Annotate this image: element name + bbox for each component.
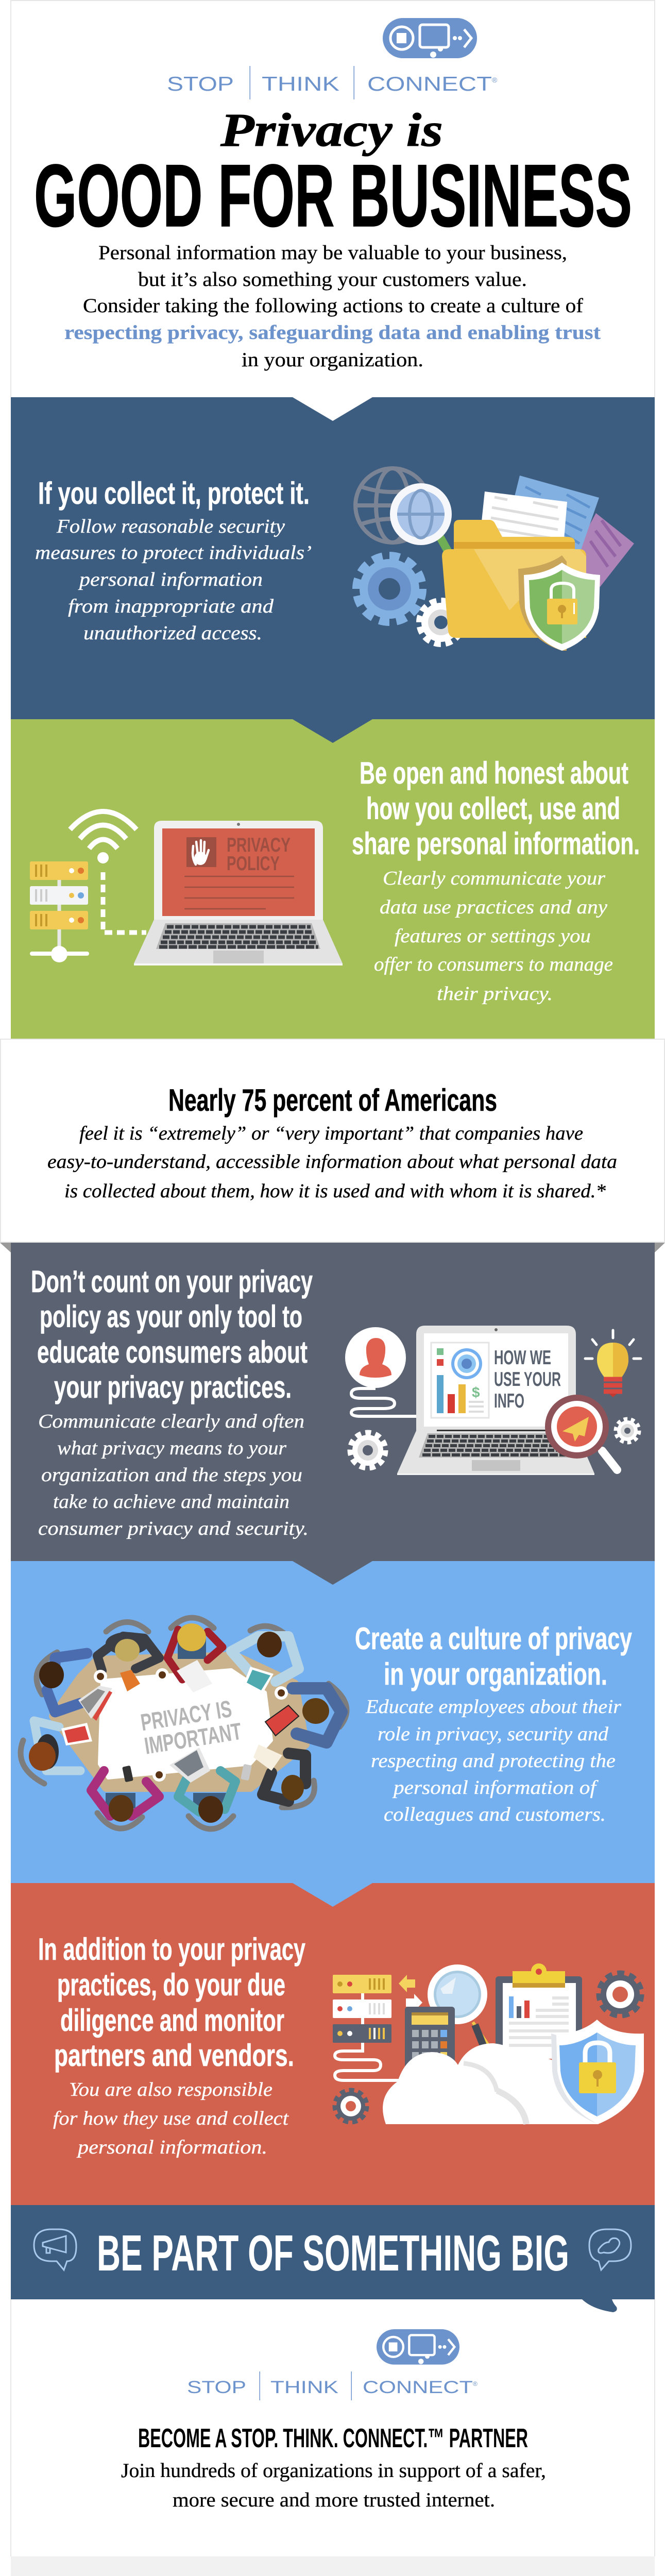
- icon: magnifier with paper plane: [545, 1395, 617, 1470]
- how we use your info label: USE YOUR: [494, 1368, 561, 1391]
- partner text: more secure and more trusted internet.: [173, 2489, 495, 2511]
- panel: create a culture of privacy: [11, 1561, 655, 1883]
- icon: logo pill: [383, 18, 477, 58]
- panel body text: unauthorized access.: [83, 622, 262, 644]
- logo wordmark: ®: [473, 2380, 478, 2387]
- title: [34, 104, 632, 245]
- panel heading: [355, 1621, 632, 1691]
- panel heading: practices, do your due: [57, 1968, 285, 2002]
- logo: partner section: [187, 2329, 478, 2400]
- icon: laptop how we use your info: [345, 1326, 641, 1475]
- logo wordmark: CONNECT: [367, 73, 492, 95]
- icon: gears: [335, 1973, 641, 2122]
- panel body text: personal information: [78, 569, 263, 590]
- icon: arrows: [399, 1975, 422, 2011]
- panel body text: data use practices and any: [380, 896, 607, 918]
- panel body text: from inappropriate and: [68, 596, 274, 617]
- panel body text: [374, 868, 613, 1005]
- table props: [61, 1660, 299, 1783]
- how we use your info label: INFO: [494, 1390, 524, 1412]
- icon: megaphone bubble: [34, 2229, 76, 2270]
- panel: footer: [11, 2556, 655, 2576]
- panel body text: [38, 1411, 309, 1539]
- panel body text: features or settings you: [395, 925, 591, 947]
- icon: stop hand: [193, 840, 209, 865]
- person: navy shirt: [293, 1688, 342, 1742]
- icon: gears: [350, 1419, 639, 1468]
- title line: privacy is: Privacy is: [220, 104, 443, 156]
- intro text: but it’s also something your customers value.: [138, 268, 527, 291]
- panel body text: measures to protect individuals’: [35, 542, 312, 564]
- panel heading: your privacy practices.: [54, 1370, 292, 1404]
- panel heading: [38, 1932, 305, 2073]
- logo wordmark: [187, 2371, 478, 2400]
- partner text: Join hundreds of organizations in support of a safer,: [121, 2460, 546, 2482]
- panel: do not count on your privacy policy: [11, 1243, 655, 2576]
- privacy policy label: POLICY: [227, 853, 280, 875]
- panel: be part of something big banner: [11, 2205, 655, 2312]
- icon: user bubble with cord: [345, 1327, 416, 1416]
- panel body text: their privacy.: [437, 983, 553, 1005]
- partner text: [121, 2460, 546, 2511]
- panel body text: [365, 1696, 621, 1825]
- logo wordmark: STOP: [167, 73, 234, 95]
- logo wordmark: [167, 66, 498, 99]
- icon: magnifier: [428, 1964, 489, 2061]
- panel body text: what privacy means to your: [57, 1437, 286, 1459]
- panel body text: offer to consumers to manage: [374, 954, 613, 975]
- panel body text: role in privacy, security and: [378, 1723, 609, 1745]
- panel body text: [35, 516, 312, 644]
- statistic body text: feel it is “extremely” or “very important” that companies have: [79, 1123, 583, 1144]
- icon: globe, folder and shield: [355, 468, 634, 651]
- illustration: servers, clipboard, cloud, shield: [333, 1963, 644, 2124]
- logo wordmark: CONNECT: [363, 2378, 473, 2397]
- icon: clipboard report: [496, 1963, 582, 2059]
- panel body text: personal information of: [392, 1777, 599, 1799]
- panel body text: colleagues and customers.: [384, 1804, 606, 1825]
- icon: bird bubble: [589, 2229, 631, 2270]
- logo wordmark: THINK: [262, 73, 339, 95]
- statistic body text: is collected about them, how it is used and with whom it is shared.*: [64, 1180, 606, 1202]
- person: left blue shirt: [39, 1653, 87, 1712]
- panel body text: You are also responsible: [69, 2079, 272, 2100]
- logo: stop think connect header: [167, 18, 498, 99]
- icon: wifi and servers: [30, 811, 146, 962]
- logo wordmark: ®: [492, 76, 498, 84]
- privacy policy label: PRIVACY: [227, 834, 291, 856]
- statistic heading: Nearly 75 percent of Americans: [168, 1083, 497, 1117]
- panel heading: In addition to your privacy: [38, 1932, 305, 1967]
- panel: if you collect it: [11, 397, 655, 719]
- illustration: meeting table with people: [21, 1618, 347, 1829]
- icon: cloud: [383, 2043, 598, 2124]
- intro text: Personal information may be valuable to your business,: [98, 242, 567, 264]
- person: dark jacket: [97, 1632, 159, 1671]
- panel body text: respecting and protecting the: [371, 1750, 616, 1772]
- panel: be open and honest: [11, 719, 655, 1039]
- panel body text: consumer privacy and security.: [38, 1518, 309, 1539]
- privacy policy label: [227, 834, 291, 875]
- logo wordmark: THINK: [270, 2378, 338, 2397]
- person: black suit: [263, 1753, 305, 1801]
- table label: IMPORTANT: [143, 1718, 243, 1759]
- how we use your info label: HOW WE: [494, 1347, 551, 1369]
- panel body text: organization and the steps you: [41, 1464, 302, 1486]
- panel body text: Communicate clearly and often: [38, 1411, 304, 1432]
- logo wordmark: STOP: [187, 2378, 246, 2397]
- person: light blue shirt: [231, 1632, 299, 1682]
- panel heading: educate consumers about: [37, 1335, 308, 1369]
- people: [29, 1623, 342, 1823]
- panel heading: If you collect it, protect it.: [38, 476, 310, 511]
- panel body text: take to achieve and maintain: [53, 1491, 289, 1513]
- panel body text: [53, 2079, 289, 2158]
- panel body text: Educate employees about their: [365, 1696, 621, 1718]
- statistic body text: [47, 1123, 617, 1202]
- panel heading: policy as your only tool to: [40, 1299, 302, 1334]
- panel body text: for how they use and collect: [53, 2108, 289, 2129]
- how we use your info label: [494, 1347, 561, 1412]
- dashboard chart: $: [472, 1384, 480, 1400]
- panel body text: personal information.: [76, 2137, 267, 2158]
- panel body text: Follow reasonable security: [56, 516, 285, 537]
- panel heading: diligence and monitor: [60, 2003, 284, 2038]
- icon: shield with lock: [551, 2020, 644, 2124]
- intro text: respecting privacy, safeguarding data and enabling trust: [64, 321, 601, 344]
- intro text: in your organization.: [242, 349, 423, 371]
- statistic body text: easy-to-understand, accessible information about what personal data: [47, 1151, 617, 1173]
- person: left light blue: [29, 1721, 80, 1771]
- person: magenta sweater: [91, 1771, 159, 1822]
- intro text: [64, 242, 601, 371]
- table label: [139, 1694, 243, 1759]
- person: teal shirt: [178, 1771, 235, 1823]
- person: red sweater: [167, 1623, 223, 1680]
- chairs: [21, 1618, 347, 1829]
- panel body text: Clearly communicate your: [383, 868, 605, 889]
- panel heading: partners and vendors.: [54, 2038, 294, 2073]
- icon: laptop with privacy policy: [134, 821, 343, 965]
- table top: [53, 1656, 305, 1788]
- intro text: Consider taking the following actions to create a culture of: [83, 295, 583, 317]
- icon: server stack: [333, 1975, 407, 2080]
- table label: PRIVACY IS: [139, 1695, 233, 1736]
- panel heading: [352, 756, 640, 861]
- panel: nearly 75 percent statistic: [0, 1039, 665, 1243]
- panel: due diligence partners and vendors: [11, 1883, 655, 2205]
- panel heading: [31, 1264, 313, 1404]
- icon: light bulb: [585, 1330, 641, 1397]
- icon: logo pill: [377, 2329, 459, 2365]
- panel heading: Don’t count on your privacy: [31, 1264, 313, 1299]
- icon: calculator: [405, 2007, 455, 2077]
- dashboard chart: [431, 1343, 489, 1418]
